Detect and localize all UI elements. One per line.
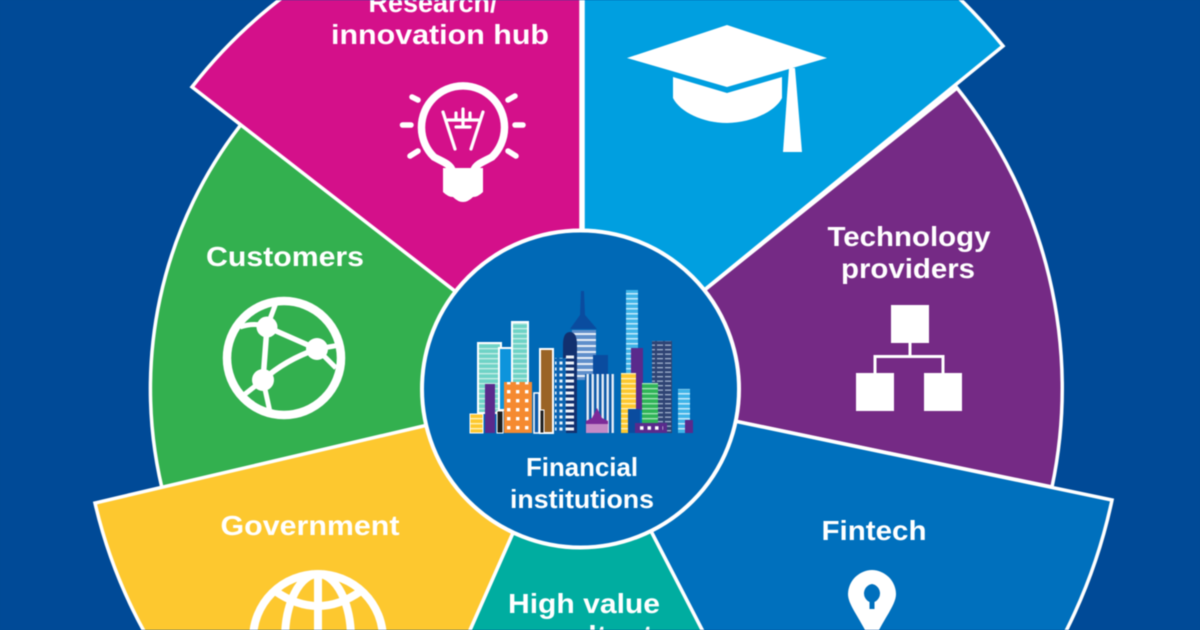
heading: research innovation hub: innovation hub: [331, 19, 549, 50]
heading: financial institutions: institutions: [510, 484, 654, 514]
heading: fintech: Fintech: [822, 515, 926, 546]
icon: globe: [253, 574, 383, 630]
panel: education: [583, 0, 1003, 389]
heading: high value consultants: [498, 588, 670, 630]
heading: technology providers: [828, 221, 991, 284]
panel: research innovation hub: [192, 0, 581, 389]
icon: network globe: [227, 301, 341, 415]
icon: graduation cap: [627, 25, 827, 152]
panel: government: [95, 388, 581, 630]
panel: high value consultants: [375, 388, 827, 630]
heading: customers: Customers: [206, 241, 364, 272]
panel: customers: [150, 117, 581, 500]
illustration: city skyline: [470, 290, 693, 433]
panel: fintech: [577, 388, 1112, 630]
heading: high value consultants: High value: [508, 588, 660, 619]
heading: technology providers: providers: [841, 253, 975, 284]
panel: financial institutions hub: [422, 230, 739, 548]
heading: financial institutions: Financial: [526, 452, 638, 482]
heading: government: Government: [220, 510, 400, 541]
panel: technology providers: [581, 88, 1062, 487]
heading: technology providers: Technology: [828, 221, 991, 252]
icon: light bulb: [402, 86, 523, 202]
heading: research innovation hub: [331, 0, 549, 50]
heading: financial institutions: [510, 452, 654, 514]
icon: location pin: [848, 570, 896, 630]
icon: org chart: [856, 305, 962, 411]
